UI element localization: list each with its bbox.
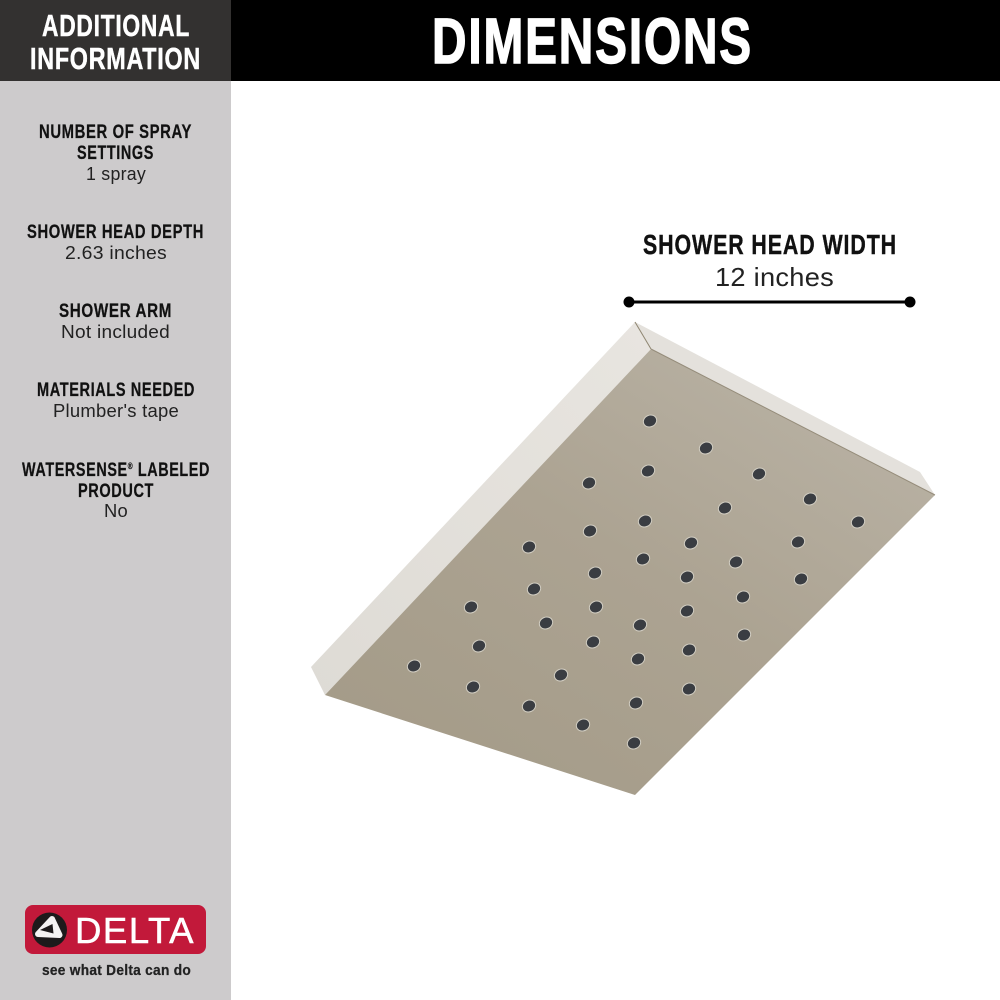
dimension label: shower head width: SHOWER HEAD WIDTH [643,229,897,260]
info: materials needed [37,379,195,421]
info: shower head depth: 2.63 inches [65,242,167,263]
info: number of spray settings [39,121,192,184]
info: watersense labeled product: ® [128,461,133,471]
logo: Delta: DELTA [75,910,195,951]
logo: Delta: see what Delta can do [42,962,191,979]
info: shower arm [59,300,172,342]
info: watersense labeled product: WATERSENSE [22,459,165,481]
dimension label: shower head width: 12 inches [715,262,834,292]
title: DIMENSIONS [432,5,753,77]
info: watersense labeled product: PRODUCT [78,480,154,502]
info: shower head depth [27,221,204,263]
icon: Delta triangle emblem [32,912,67,948]
info: number of spray settings: SETTINGS [77,142,154,164]
dimension label: shower head width [643,229,897,292]
info: number of spray settings: NUMBER OF SPRAY [39,121,192,143]
left side edge [311,322,651,695]
spray face [325,349,935,795]
info: watersense labeled product: No [104,500,128,521]
info: watersense labeled product [22,459,210,521]
spray nozzles [405,413,867,751]
shower head illustration [311,322,935,795]
sidebar heading [0,0,231,81]
sidebar heading: INFORMATION [30,41,201,76]
info: shower arm: SHOWER ARM [59,300,172,322]
info: number of spray settings: 1 spray [86,163,146,184]
sidebar heading: ADDITIONAL [42,8,190,43]
info: materials needed: Plumber's tape [53,400,179,421]
main header bar [231,0,1000,81]
logo: Delta [25,905,206,979]
info: shower head depth: SHOWER HEAD DEPTH [27,221,204,243]
sidebar panel [0,81,231,1000]
info: watersense labeled product: LABELED [133,459,210,481]
info: materials needed: MATERIALS NEEDED [37,379,195,401]
info: shower arm: Not included [61,321,170,342]
dimension line [624,296,916,308]
top side edge [635,322,935,495]
